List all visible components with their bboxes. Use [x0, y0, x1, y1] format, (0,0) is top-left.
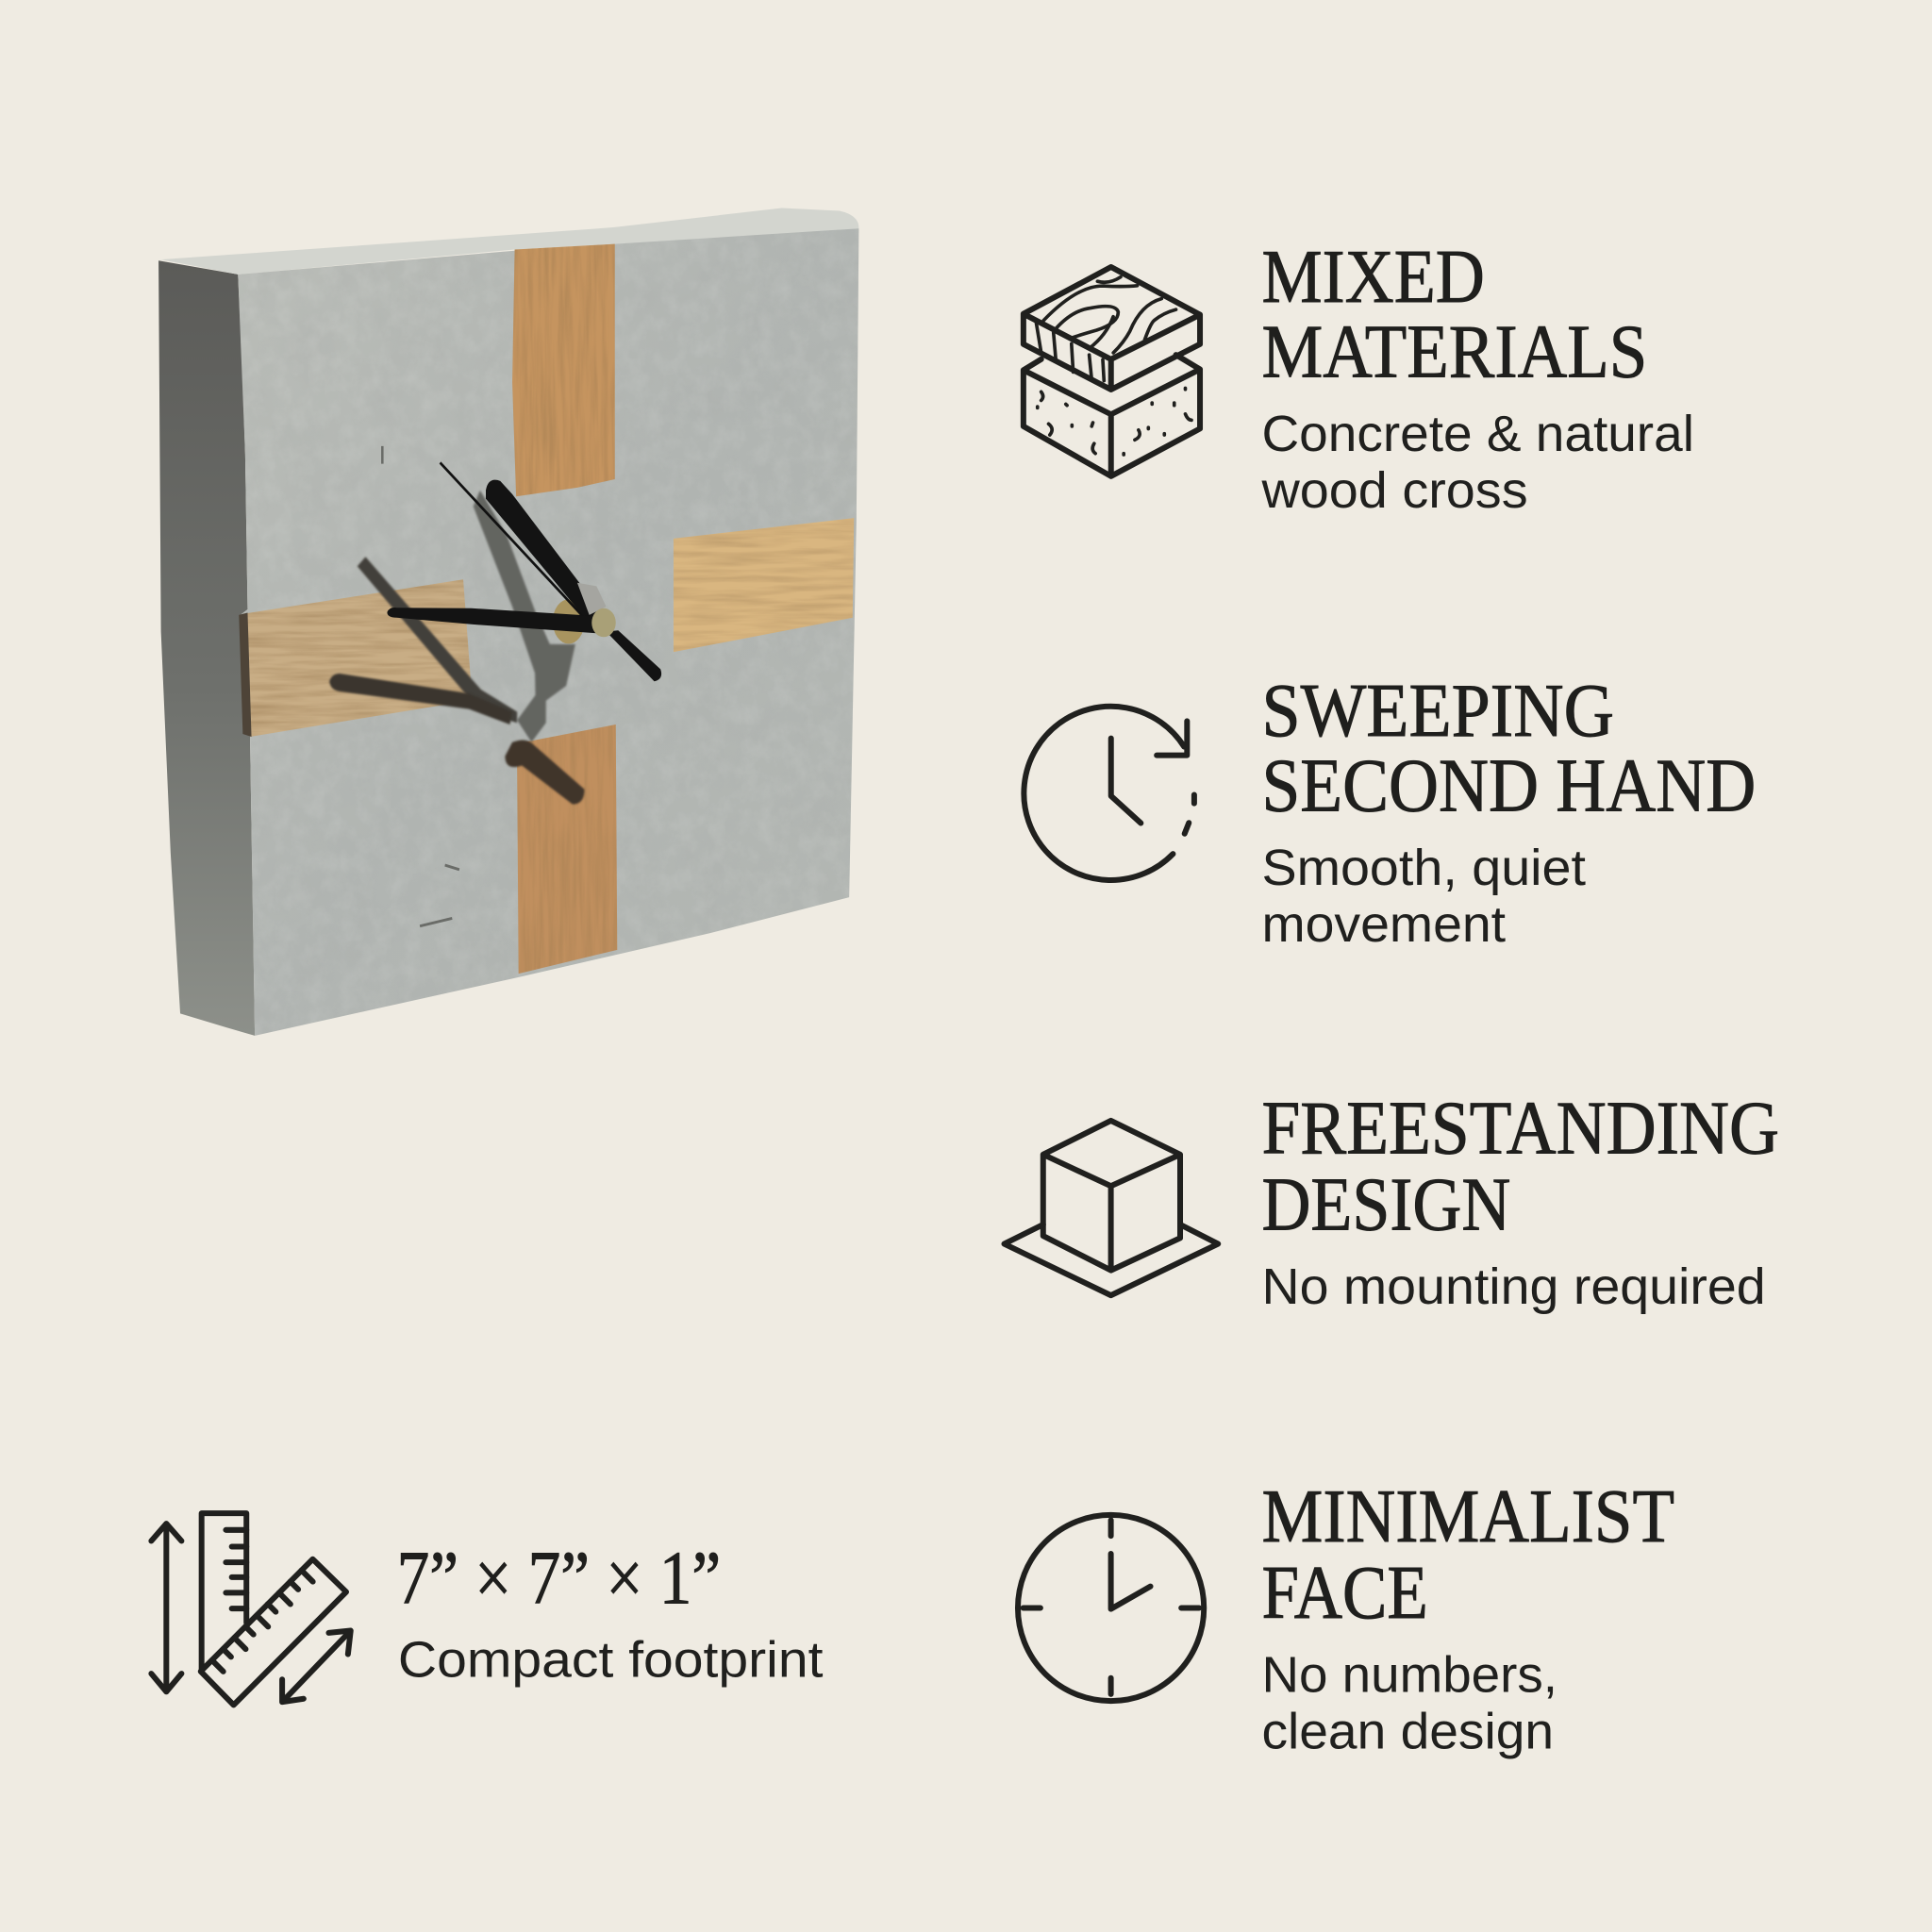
feature: mixed materials: [1024, 234, 1694, 519]
feature: sweeping second hand: [1024, 668, 1756, 953]
shadow of second hand: [358, 557, 517, 723]
description: movement: [1261, 896, 1506, 953]
heading: FREESTANDING: [1261, 1086, 1779, 1171]
description: [1261, 840, 1586, 953]
hand tail: [607, 630, 661, 681]
wood inlay left: [243, 579, 472, 737]
feature: freestanding design: [1004, 1086, 1779, 1315]
wood inlay left end grain: [239, 612, 252, 737]
dimensions caption: Compact footprint: [398, 1632, 823, 1689]
icon: rulers with arrows: [151, 1513, 351, 1705]
description: Concrete & natural: [1261, 406, 1694, 462]
heading: MINIMALIST: [1261, 1474, 1674, 1558]
dimensions text: 7” × 7” × 1”: [397, 1535, 721, 1620]
clock front face: [238, 228, 858, 1036]
product photo: concrete and wood clock: [158, 208, 858, 1036]
shadow of hour hand: [329, 674, 512, 724]
description: No numbers,: [1261, 1646, 1557, 1703]
feature: minimalist face: [1018, 1474, 1674, 1759]
heading: SWEEPING: [1261, 668, 1614, 753]
heading: [1261, 234, 1647, 394]
description: Smooth, quiet: [1261, 840, 1586, 896]
description: No mounting required: [1261, 1258, 1766, 1315]
clock top edge: [161, 208, 858, 275]
icon: wood and concrete layers: [1024, 267, 1200, 476]
heading: FACE: [1261, 1550, 1428, 1635]
brass movement collar: [553, 599, 585, 643]
concrete texture light: [238, 228, 858, 1036]
wood inlay top: [512, 244, 615, 496]
dimensions block: [151, 1513, 823, 1705]
hour hand: [387, 608, 596, 633]
heading: [1261, 668, 1756, 827]
heading: SECOND HAND: [1261, 742, 1756, 827]
description: [1261, 1646, 1557, 1759]
icon: clock with sweep arrow: [1024, 707, 1194, 880]
clock side face: [158, 260, 255, 1036]
icon: cube on base: [1004, 1121, 1218, 1295]
concrete texture dark: [238, 228, 858, 1036]
heading: MATERIALS: [1261, 309, 1647, 394]
heading: [1261, 1474, 1674, 1635]
icon: plain clock face: [1018, 1515, 1204, 1701]
description: wood cross: [1260, 462, 1528, 519]
second hand: [441, 462, 590, 624]
wood inlay right: [674, 518, 854, 652]
description: clean design: [1261, 1703, 1554, 1759]
heading: MIXED: [1261, 234, 1485, 319]
brass hub: [591, 608, 616, 637]
light shadow of minute hand: [474, 491, 575, 742]
metal nut: [577, 583, 607, 615]
description: [1260, 406, 1694, 519]
heading: DESIGN: [1261, 1162, 1510, 1247]
wood inlay bottom: [517, 724, 617, 974]
heading: [1261, 1086, 1779, 1247]
shadow of hand tail: [505, 740, 585, 805]
minute hand: [486, 480, 604, 624]
concrete surface marks: [382, 446, 459, 926]
